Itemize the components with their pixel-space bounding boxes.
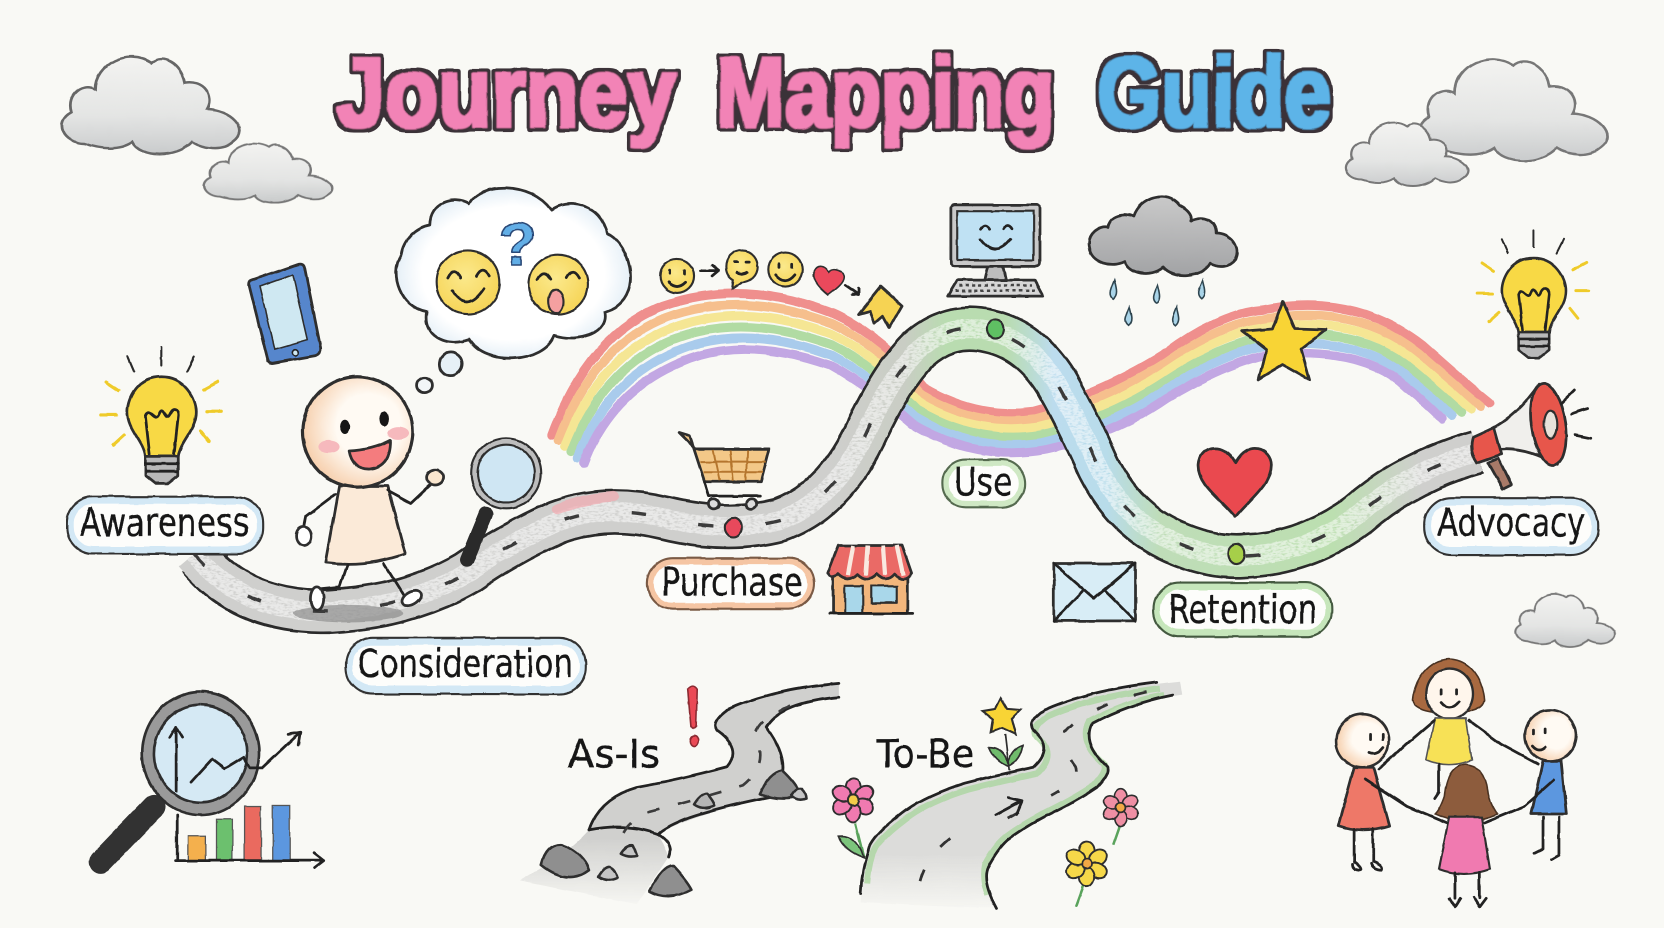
flower: right pink [1101, 789, 1140, 845]
icon: rain cloud [1089, 197, 1237, 326]
person: left [1336, 714, 1389, 870]
icon: exclamation mark [688, 687, 698, 746]
label: Awareness: Awareness [80, 501, 249, 546]
body [326, 486, 405, 564]
road shadow under character [293, 605, 403, 622]
waypoint dot: purchase [725, 518, 742, 537]
icon: left light bulb [101, 347, 221, 484]
label: Consideration [346, 638, 586, 694]
rocks [541, 770, 807, 896]
label: Awareness [67, 497, 263, 554]
flower: yellow star [983, 698, 1023, 770]
cloud: top right large [1419, 59, 1608, 161]
title word: Mapping: Mapping [716, 37, 1055, 148]
label: Use: Use [954, 461, 1012, 506]
label: As-Is: As-Is [568, 732, 660, 777]
label: Purchase: Purchase [661, 560, 803, 605]
team of people in a circle [1336, 659, 1576, 906]
title word: Guide: Guide [1097, 37, 1331, 148]
emotion sequence icons [660, 250, 902, 328]
icon: right light bulb [1477, 230, 1589, 358]
icon: megaphone [1472, 381, 1591, 489]
cloud: top right small [1346, 123, 1468, 186]
person: right [1525, 710, 1576, 860]
happy face [436, 250, 500, 314]
label: Retention [1154, 583, 1332, 637]
icon: shop front [828, 545, 913, 613]
title [336, 37, 1331, 148]
icon: smartphone [249, 264, 321, 363]
head [302, 377, 413, 487]
road centre dashes [194, 329, 1477, 611]
label: Advocacy: Advocacy [1437, 501, 1585, 546]
legs and feet [318, 564, 405, 597]
title word: Journey: Journey [336, 37, 676, 148]
to-be road with flowers [830, 681, 1182, 908]
direction arrow [995, 798, 1022, 815]
icon: star on rainbow [1243, 301, 1325, 380]
icon: magnifying glass by character [467, 441, 538, 560]
cloud: lower right small [1515, 594, 1615, 647]
arms and hands [304, 485, 430, 527]
label: Advocacy [1424, 498, 1598, 555]
label: Retention: Retention [1168, 588, 1317, 633]
icon: analytics magnifier with chart [101, 692, 324, 868]
waypoint dot: use [987, 319, 1004, 339]
label: To-Be: To-Be [876, 732, 974, 777]
flower: left pink [830, 778, 876, 857]
icon: envelope [1054, 564, 1136, 621]
surprised face [528, 255, 588, 314]
waypoint dot: retention [1228, 544, 1245, 564]
icon: smiling computer [948, 205, 1043, 296]
label: Consideration: Consideration [358, 642, 573, 687]
question mark: ? [499, 210, 536, 279]
linked arms [1365, 721, 1554, 824]
main journey road [194, 329, 1477, 622]
person: front girl [1435, 764, 1497, 906]
thought bubble [396, 188, 630, 393]
icon: shopping cart [679, 433, 769, 509]
rain drops [1110, 280, 1205, 326]
icon: heart [1198, 448, 1271, 517]
rainbow [552, 293, 1490, 464]
person: top woman [1412, 659, 1485, 798]
bar chart [175, 805, 324, 868]
cloud: top left small [204, 144, 332, 203]
as-is rocky road [520, 683, 838, 904]
flower: lower yellow [1064, 842, 1110, 906]
character walking [296, 377, 444, 610]
cloud: top left large [62, 57, 240, 154]
face [340, 420, 350, 434]
road pink patch [557, 497, 613, 509]
